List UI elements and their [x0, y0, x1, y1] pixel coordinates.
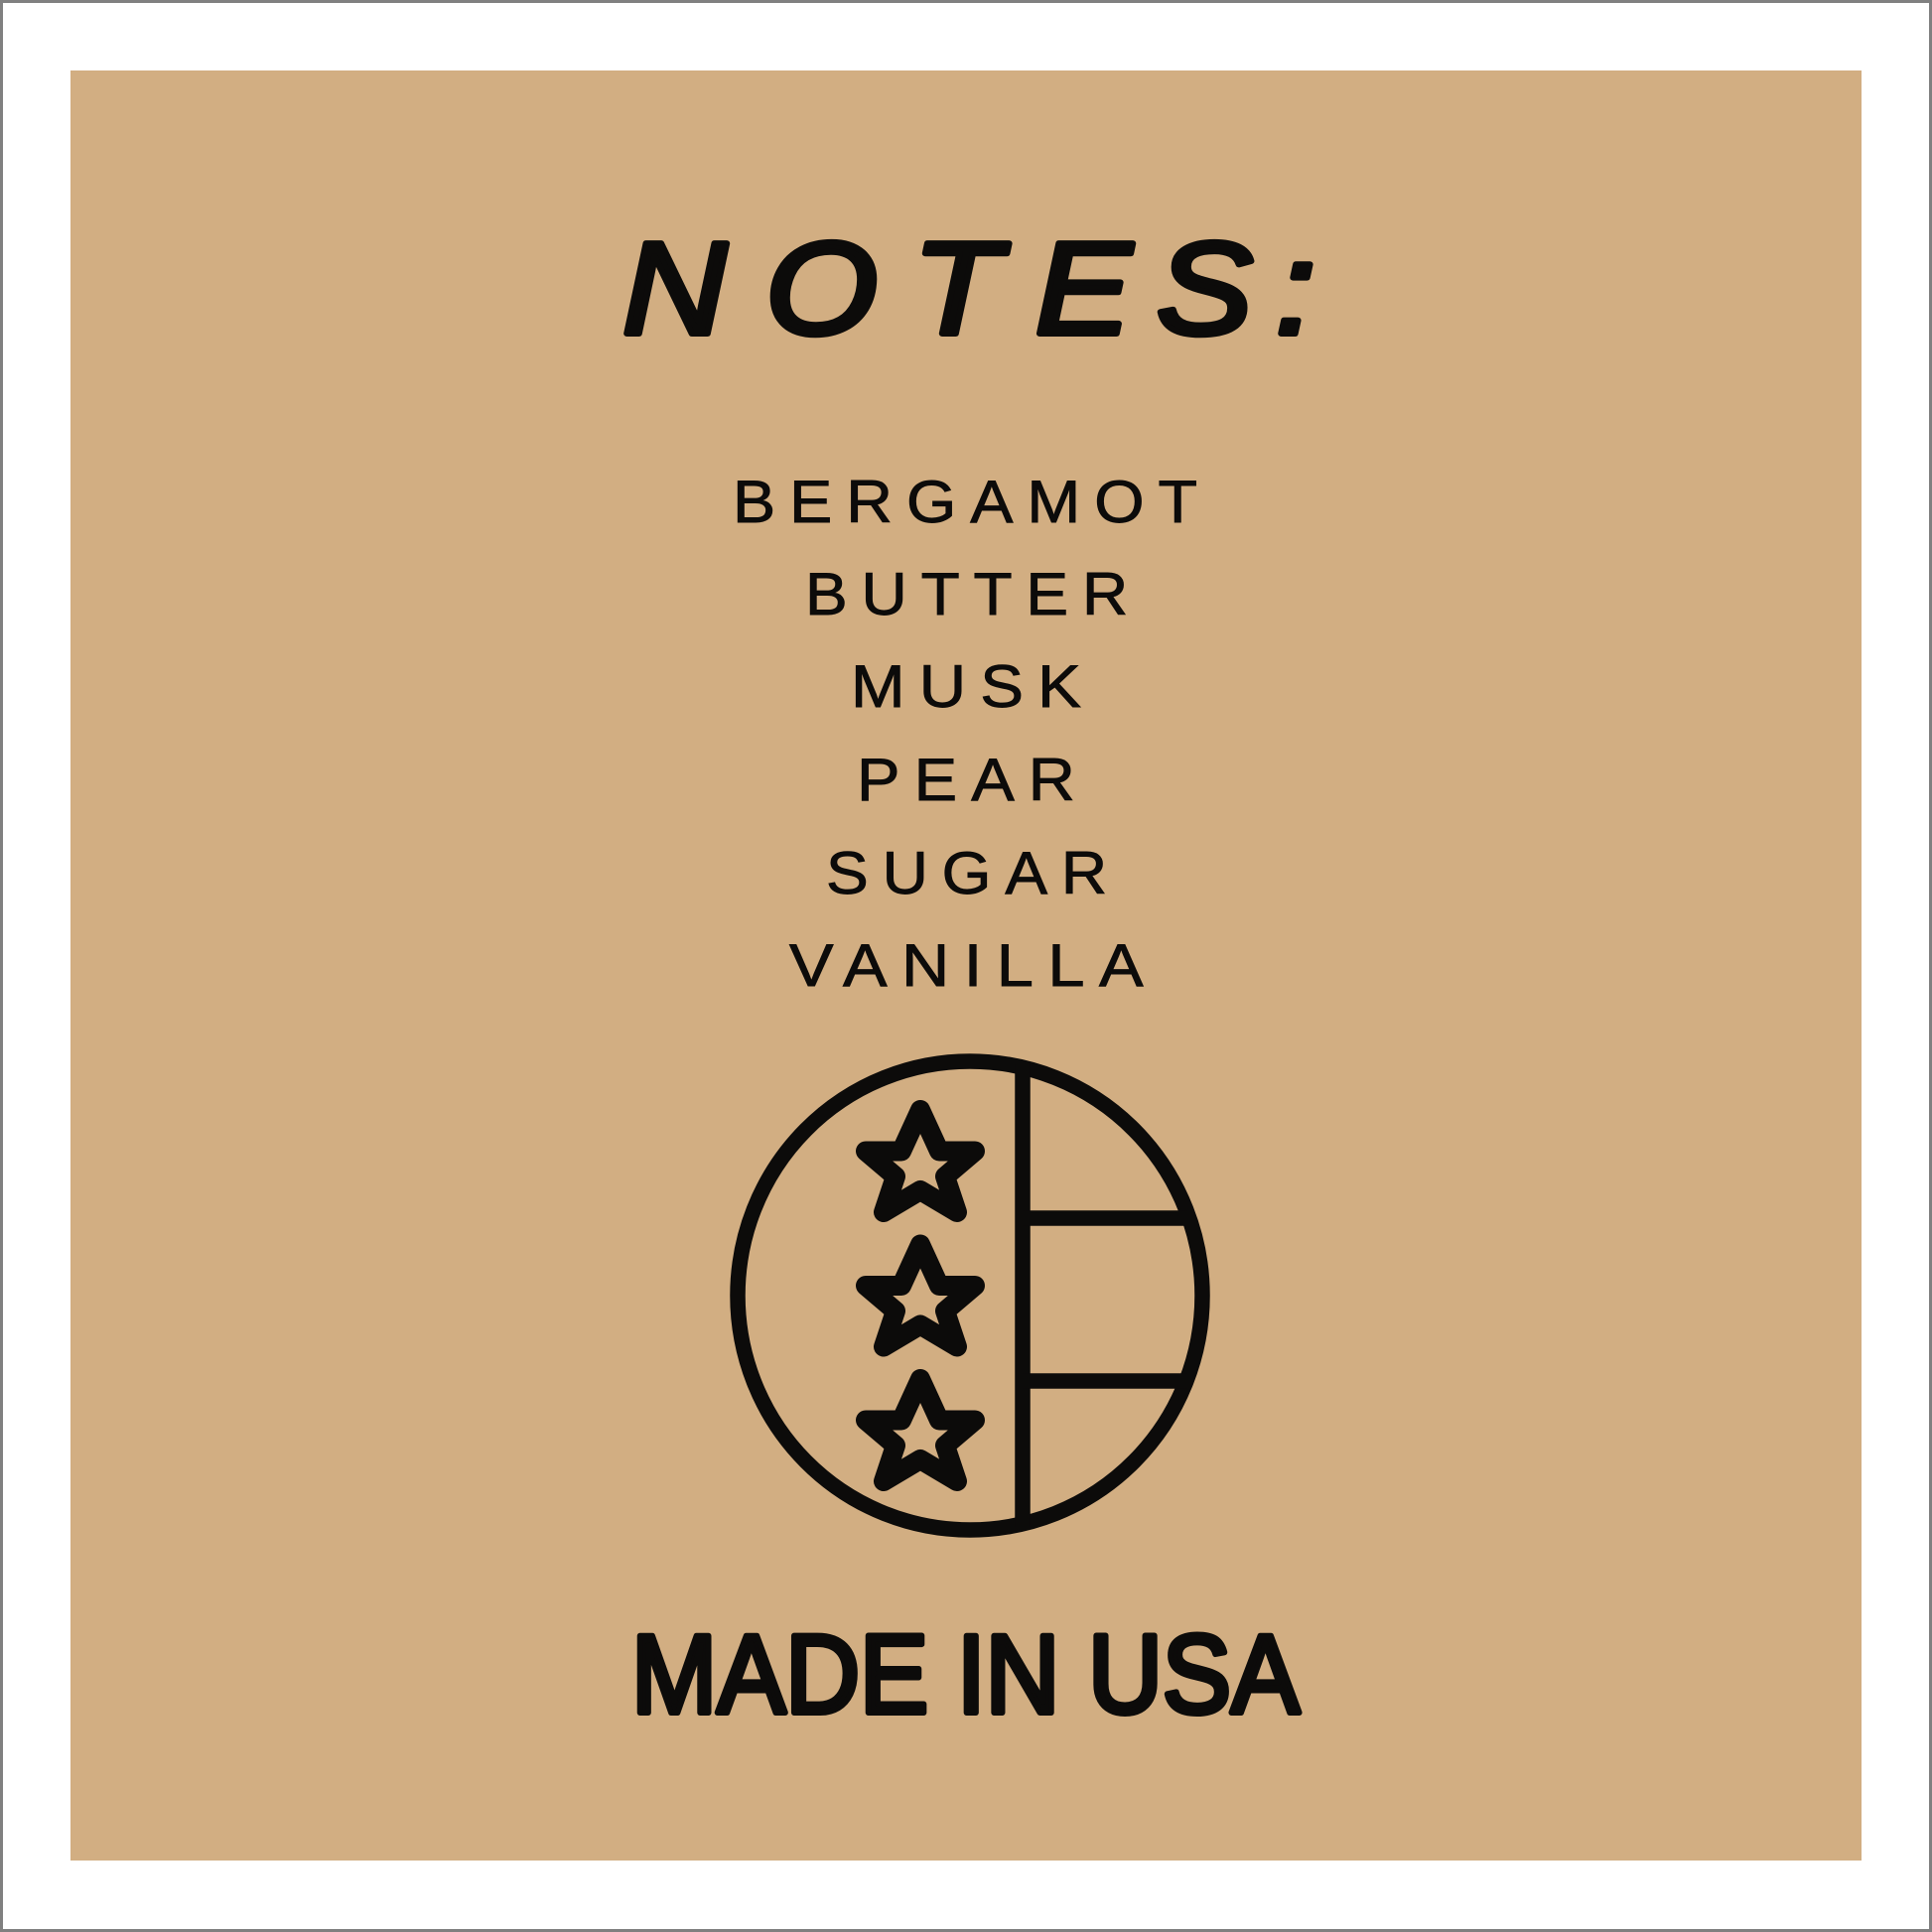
icon: middle star	[866, 1245, 975, 1346]
note: bergamot: BERGAMOT	[733, 469, 1211, 535]
icon: USA flag in circle	[738, 1061, 1202, 1530]
icon: bottom star	[866, 1379, 975, 1481]
list of notes	[733, 469, 1211, 999]
title: NOTES:	[622, 215, 1315, 362]
made in USA label: MADE IN USA	[631, 1612, 1300, 1736]
note: pear: PEAR	[857, 747, 1089, 813]
note: butter: BUTTER	[805, 561, 1142, 627]
icon: upper stripe line	[1023, 1210, 1187, 1226]
note: sugar: SUGAR	[826, 840, 1121, 906]
note: musk: MUSK	[851, 653, 1095, 720]
note: vanilla: VANILLA	[789, 932, 1158, 999]
icon: lower stripe line	[1023, 1373, 1187, 1389]
icon: top star	[866, 1110, 975, 1212]
icon: vertical divider	[1015, 1064, 1031, 1527]
icon: circle outline	[738, 1061, 1202, 1530]
